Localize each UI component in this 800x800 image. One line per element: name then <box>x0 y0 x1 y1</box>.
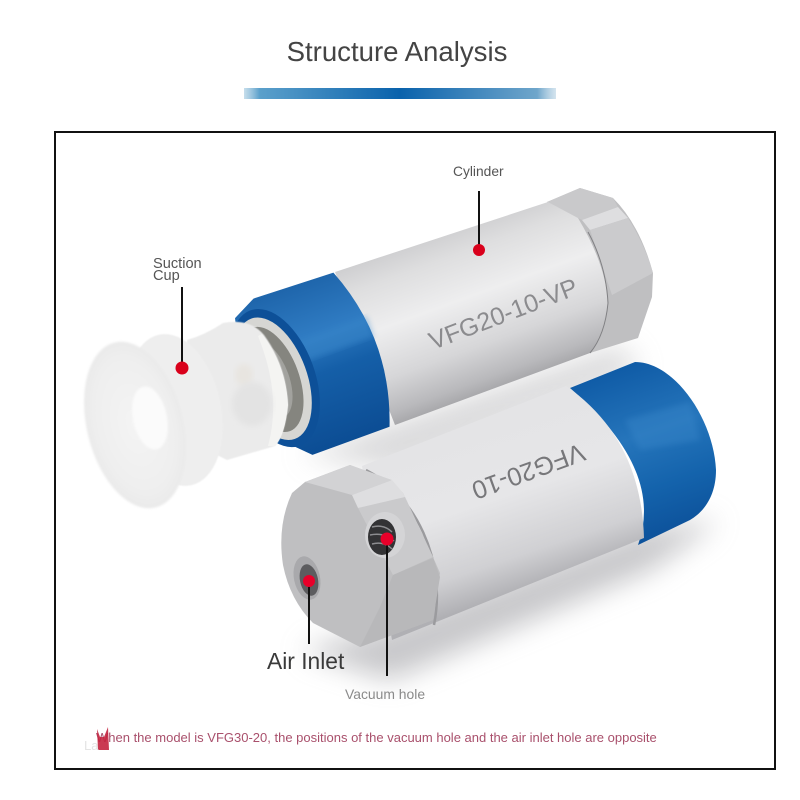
title: Structure Analysis <box>287 36 507 67</box>
icon: small red mark over note <box>84 727 109 753</box>
blue collar <box>223 264 405 467</box>
picture frame <box>55 132 775 769</box>
product: VFG20-10-VP cylinder <box>209 188 653 472</box>
callout: Suction Cup: Cup <box>153 268 180 284</box>
hex end cap <box>547 188 653 353</box>
callout: Suction Cup: Suction <box>153 256 202 272</box>
centre opening <box>127 383 173 453</box>
callout: Air Inlet <box>267 575 345 674</box>
callout: Vacuum hole <box>345 532 425 702</box>
silver body <box>362 386 644 640</box>
bearing face <box>213 297 337 459</box>
second ring <box>114 325 236 495</box>
neck <box>187 322 288 460</box>
vacuum hole <box>365 512 405 558</box>
outer flange <box>68 331 202 519</box>
note: opposite hole positions: When the model is VFG30-20, the positions of the vacuum hole and the air inlet hole are opposite <box>96 730 657 745</box>
title underline bar <box>244 88 556 99</box>
hex end face <box>281 465 440 647</box>
icon: small red mark over note: La <box>84 738 99 753</box>
callout: Suction Cup <box>153 256 202 374</box>
engraved model text: VFG20-10-VP <box>425 273 582 356</box>
shadow under products <box>300 345 720 680</box>
product: VFG20-10 cylinder <box>281 362 716 647</box>
silver body <box>335 202 608 425</box>
engraved model text: VFG20-10 <box>468 437 589 504</box>
air inlet hole <box>290 554 324 602</box>
blue end <box>570 362 716 545</box>
product: suction cup <box>68 322 288 519</box>
callout: Cylinder <box>453 164 504 256</box>
callout: Air Inlet: Air Inlet <box>267 648 345 674</box>
callout: Vacuum hole: Vacuum hole <box>345 686 425 702</box>
callout: Cylinder: Cylinder <box>453 164 504 179</box>
